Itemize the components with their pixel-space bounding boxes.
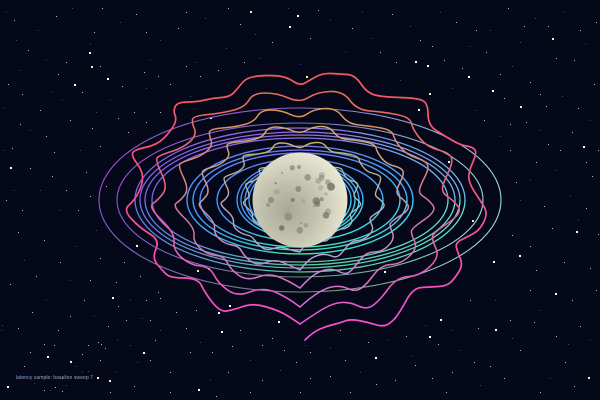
spiral turn 3: [175, 108, 434, 307]
wavy spiral: [127, 73, 486, 340]
spiral turn 1: [127, 73, 486, 340]
moon: [252, 152, 348, 248]
spiral turn 4: [199, 126, 408, 288]
moon craters: [266, 165, 335, 234]
spiral turn 2: [152, 91, 459, 324]
moon disc: [252, 152, 348, 248]
thin elliptical rings: [99, 108, 501, 292]
inner rings: [187, 146, 413, 254]
middle rings: [135, 128, 465, 272]
outer rings: [99, 108, 501, 292]
caption: latency sample: baseline sweep 7: [16, 375, 93, 381]
spiral turn 6: [243, 159, 361, 252]
spiral turn 5: [221, 142, 384, 270]
yellow stars: [70, 12, 590, 381]
